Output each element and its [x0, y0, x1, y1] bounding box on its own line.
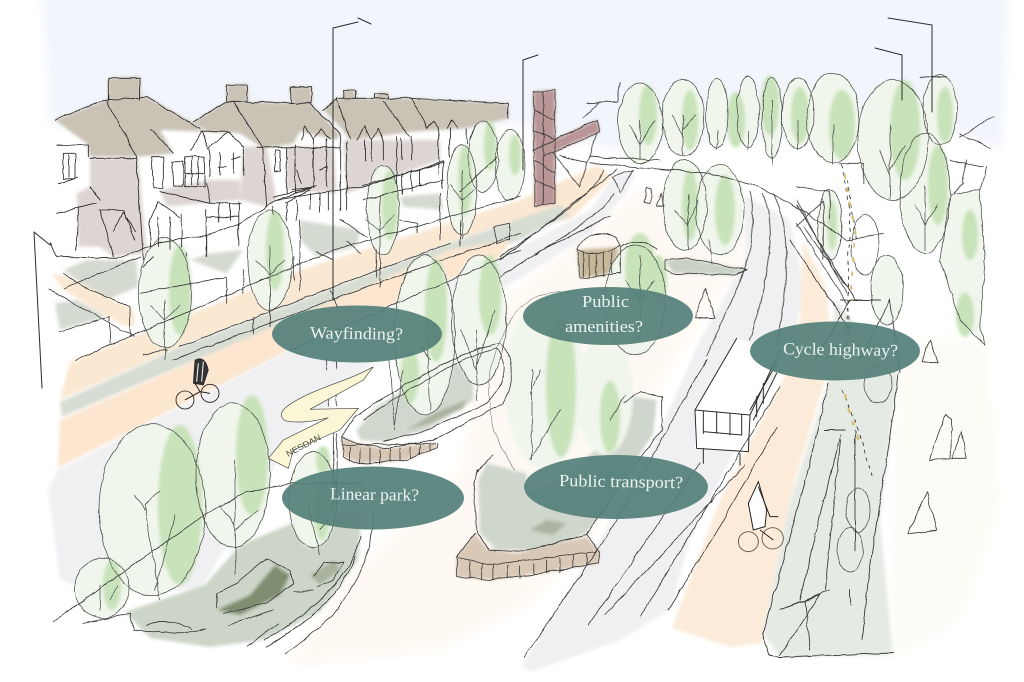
bubble: Cycle highway: Cycle highway?	[783, 339, 898, 360]
tree foliage	[75, 73, 985, 618]
sketch lines: front gardens, paths and street	[50, 77, 993, 360]
bubble: Wayfinding: Wayfinding?	[310, 323, 403, 344]
lamp posts and flag pole	[34, 18, 932, 388]
bus shelter	[695, 338, 780, 465]
bubble: Linear park	[282, 466, 464, 530]
sky wash	[42, 0, 1008, 150]
bubble: Wayfinding	[272, 306, 442, 362]
bubble: Linear park: Linear park?	[330, 484, 419, 505]
road markings and pedestrians lower right	[523, 340, 967, 658]
ground washes	[48, 165, 1000, 672]
cyclist on cycle highway	[738, 482, 783, 552]
bubble: Public transport: Public transport?	[559, 471, 683, 492]
cyclist on left path	[176, 359, 219, 409]
sketch lines: houses and street edge	[50, 78, 508, 267]
bubble: Public amenities: amenities?	[565, 317, 643, 336]
bubble: Public amenities	[523, 287, 693, 345]
bubble: Public amenities: Public	[582, 292, 629, 311]
tree outlines and trunks	[75, 73, 985, 618]
NESDAN direction sign: NESDAN	[284, 432, 322, 459]
NESDAN direction sign	[268, 367, 373, 468]
planting beds, brick planters and kiosk wash	[125, 247, 747, 647]
tower structure wash	[533, 90, 600, 207]
bubble: Public transport	[524, 455, 708, 519]
brick planter and bed outlines	[53, 343, 662, 653]
bubble: Cycle highway	[750, 322, 920, 380]
house roofs and walls wash	[52, 77, 508, 330]
decorative dotted hedge chain	[763, 165, 900, 657]
